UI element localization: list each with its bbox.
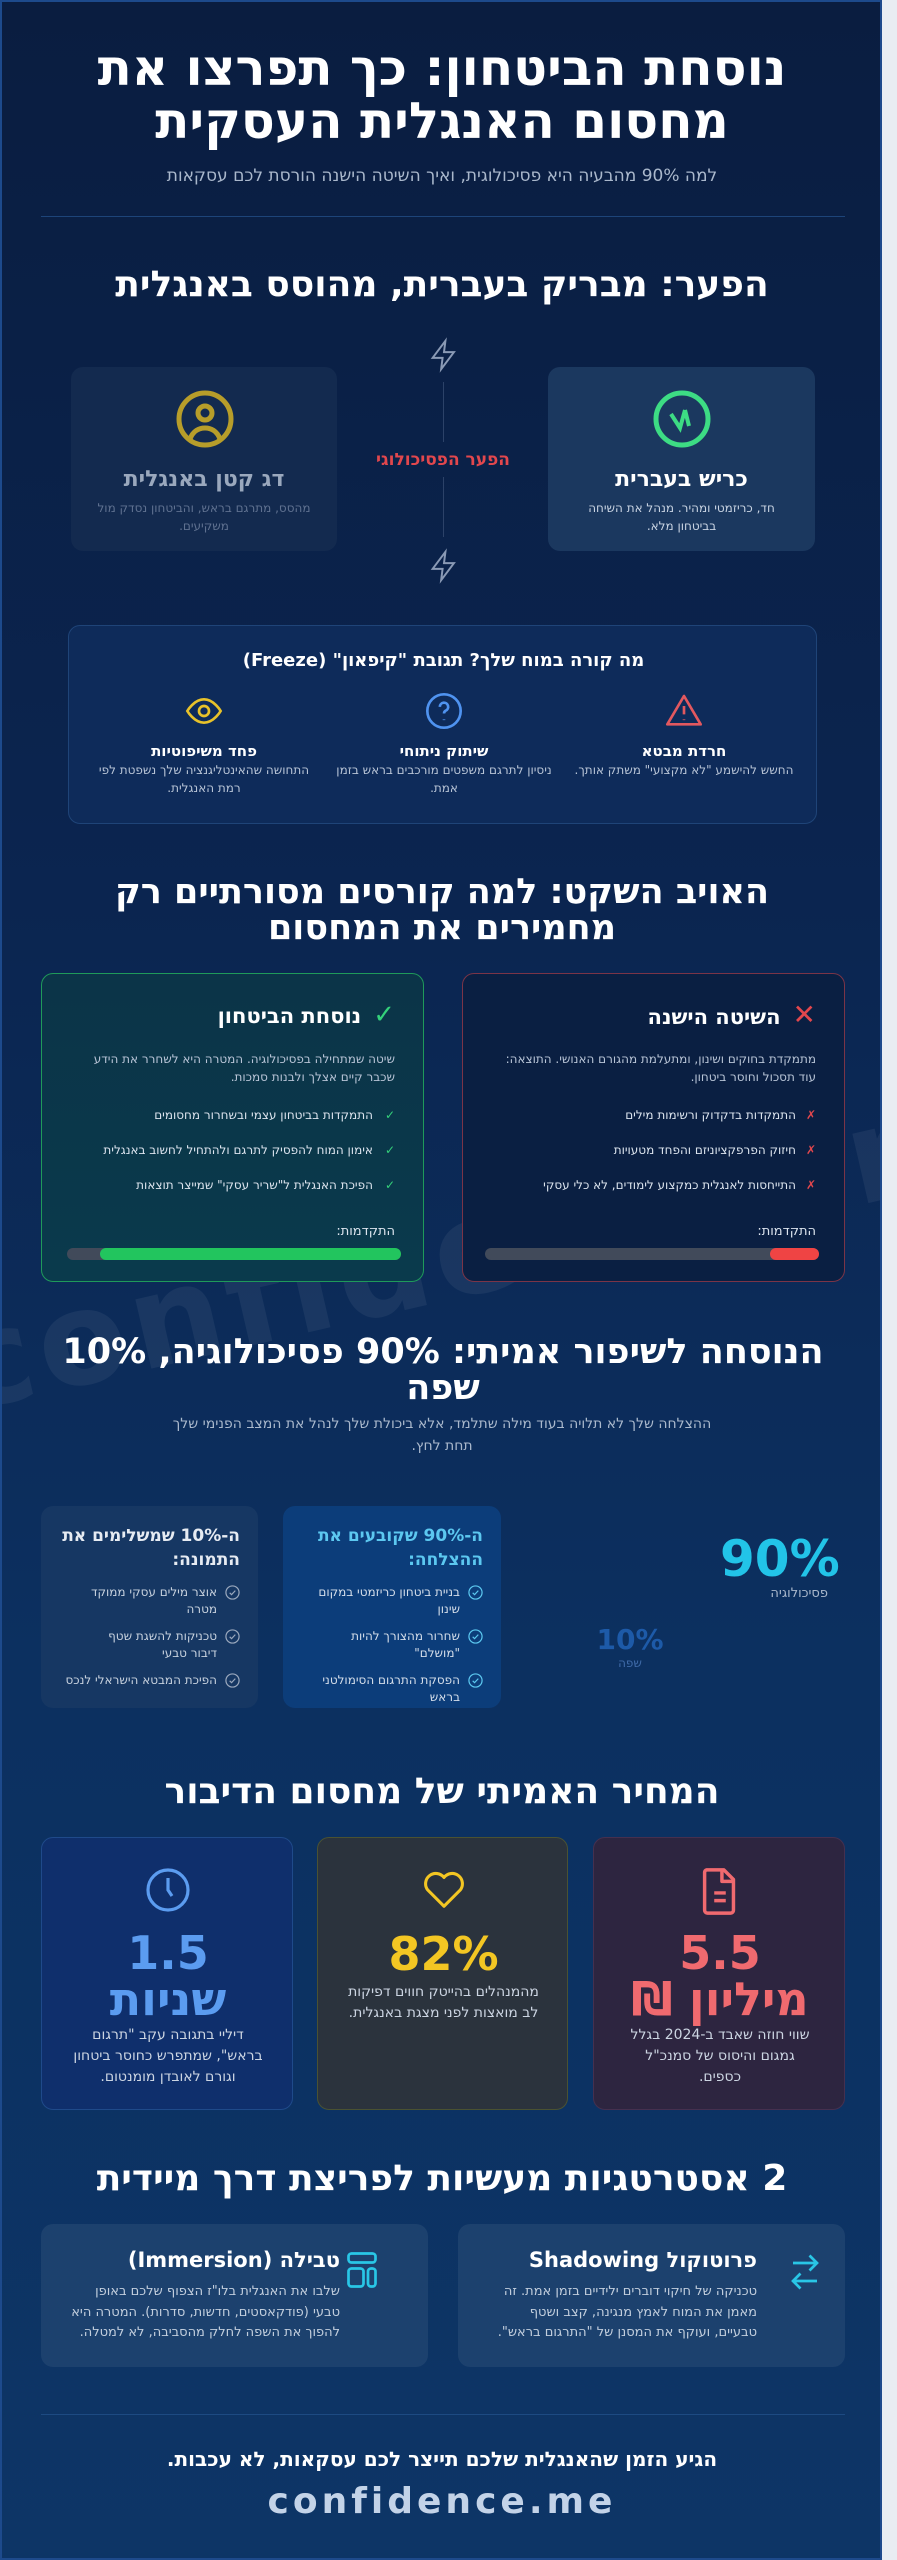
title — [98, 39, 786, 150]
panel: 90% list — [283, 1506, 501, 1708]
heading: formula — [62, 1332, 824, 1408]
number: 1.5 — [127, 1926, 209, 1980]
list: הפסקת התרגום הסימולטני בראש — [322, 1673, 460, 1704]
icon: arrows — [791, 2254, 819, 2290]
panel: confidence formula — [41, 973, 424, 1282]
heading: formula: שפה — [406, 1368, 480, 1408]
box title: ה-90% שקובעים את ההצלחה: — [318, 1526, 483, 1570]
panel: 1.5 seconds — [41, 1837, 293, 2110]
card title: דג קטן באנגלית — [124, 467, 284, 492]
number — [631, 1926, 809, 2026]
item: fear of judgment: פחד משיפוטיות — [151, 742, 257, 760]
card title with check: ✓נוסחת הביטחון — [218, 1000, 395, 1030]
text: דיליי בתגובה עקב "תרגום בראש", שמתפרש כחוסר ביטחון וגורם לאובדן מומנטום. — [73, 2027, 263, 2085]
footer tagline: הגיע הזמן שהאנגלית שלכם תייצר לכם עסקאות, לא עכבות. — [167, 2447, 717, 2471]
title: נוסחת הביטחון: כך תפרצו את — [98, 39, 786, 97]
number: שניות — [110, 1972, 226, 2026]
panel: 5.5 million — [593, 1837, 845, 2110]
heading: silent enemy: האויב השקט: למה קורסים מסורתיים רק — [115, 872, 769, 912]
list: בניית ביטחון כריזמטי במקום שינון — [318, 1585, 460, 1616]
list — [318, 1585, 483, 1704]
card title: טבילה (Immersion) — [128, 2248, 340, 2272]
card text: טכניקה של חיקוי דוברים ילידיים בזמן אמת. זה מאמן את המוח לאמץ מנגינה, קצב ושטף טבעיים, ועוקף את המסנן של "התרגום בראש". — [498, 2284, 757, 2340]
list: ✓אימון המוח להפסיק לתרגם ולהתחיל לחשוב באנגלית — [103, 1143, 395, 1157]
stat: 90%: 90% — [720, 1530, 840, 1588]
icon: question — [426, 693, 462, 729]
list: הפיכת המבטא הישראלי לנכס — [65, 1673, 217, 1687]
card text: מהסס, מתרגם בראש, והביטחון נסדק מול משקיעים. — [97, 501, 310, 533]
progress bar — [485, 1248, 819, 1260]
progress label: התקדמות: — [336, 1224, 395, 1239]
progress label: התקדמות: — [757, 1224, 816, 1239]
panel: small fish in English — [71, 367, 337, 551]
title: מחסום האנגלית העסקית — [155, 92, 729, 150]
icon: lightning top — [430, 337, 456, 373]
item: analysis paralysis: ניסיון לתרגם משפטים מורכבים בראש בזמן אמת. — [336, 763, 552, 795]
panel: 82% — [317, 1837, 568, 2110]
list — [543, 1108, 816, 1192]
item: fear of judgment: התחושה שהאינטליגנציה שלך נשפטת לפי רמת האנגלית. — [99, 763, 309, 795]
icon: document — [702, 1868, 736, 1915]
list: ✗התמקדות בדקדוק ורשימות מילים — [625, 1108, 816, 1122]
subtitle: למה 90% מהבעיה היא פסיכולוגית, ואיך השיטה הישנה הורסת לכם עסקאות — [167, 166, 717, 186]
list: ✗חיזוק הפרפקציוניזם והפחד מטעויות — [614, 1143, 816, 1157]
gap label: הפער הפסיכולוגי — [376, 450, 510, 470]
list — [65, 1585, 240, 1688]
number — [110, 1926, 226, 2026]
panel title: מה קורה במוח שלך? תגובת "קיפאון" (Freeze) — [243, 650, 644, 671]
list: טכניקות להשגת שטף דיבור טבעי — [108, 1629, 217, 1660]
item: fear of expression: החשש להישמע "לא מקצועי" משתק אותך. — [575, 763, 793, 777]
card text: שלבו את האנגלית בלו"ז הצפוף שלכם באופן טבעי (פודקאסטים, חדשות, סדרות). המטרה היא להפוך את השפה לחלק מהסביבה, לא למטלה. — [71, 2284, 340, 2340]
heading: strategies: 2 אסטרטגיות מעשיות לפריצת דרך מיידית — [97, 2158, 787, 2199]
card title with X: ✕השיטה הישנה — [648, 998, 816, 1031]
item: analysis paralysis: שיתוק ניתוחי — [400, 742, 488, 760]
progress bar — [67, 1248, 401, 1260]
panel: freeze — [68, 625, 817, 824]
number: 5.5 — [679, 1926, 761, 1980]
panel: immersion — [41, 2224, 428, 2367]
card text: חד, כריזמטי ומהיר. מנהל את השיחה בביטחון מלא. — [588, 501, 775, 533]
subtext: ההצלחה שלך לא תלויה בעוד מילה שתלמד, אלא ביכולת שלך לנהל את המצב הפנימי שלך תחת לחץ. — [173, 1416, 711, 1454]
item: fear of judgment — [99, 698, 309, 795]
icon: lightning bottom — [430, 548, 456, 584]
stat: 10%: שפה — [618, 1656, 642, 1670]
description: מתמקדת בחוקים ושינון, ומתעלמת מהגורם האנושי. התוצאה: עוד תסכול וחוסר ביטחון. — [506, 1052, 816, 1084]
list: אוצר מילים עסקי ממוקד מטרה — [91, 1585, 217, 1616]
box title: ה-10% שמשלימים את התמונה: — [62, 1526, 240, 1570]
heading: silent enemy — [115, 872, 769, 948]
list — [103, 1108, 395, 1192]
list: שחרור מהצורך להיות "מושלם" — [351, 1629, 460, 1660]
number: מיליון ₪ — [631, 1972, 809, 2026]
card title: פרוטוקול Shadowing — [529, 2248, 757, 2272]
heading: silent enemy: מחמירים את המחסום — [268, 908, 616, 948]
card title: כריש בעברית — [615, 467, 748, 492]
icon: heart — [424, 1872, 464, 1908]
panel: old method — [462, 973, 845, 1282]
icon: clock — [146, 1868, 190, 1912]
icon: warning — [666, 694, 702, 726]
list: ✗התייחסות לאנגלית כמקצוע לימודים, לא כלי עסקי — [543, 1178, 816, 1192]
list: ✓התמקדות בביטחון עצמי ובשחרור מחסומים — [154, 1108, 395, 1122]
text: שווי חוזה שאבד ב-2024 בגלל גמגום והיסוס של סמנכ"ל כספים. — [630, 2027, 810, 2085]
stat: 10%: 10% — [596, 1623, 664, 1656]
stat: 90%: פסיכולוגיה — [770, 1586, 828, 1601]
footer brand: confidence.me — [268, 2481, 616, 2522]
item: fear of expression — [575, 694, 793, 777]
icon: green check circle — [654, 390, 710, 448]
description: שיטה שמתחילה בפסיכולוגיה. המטרה היא לשחרר את הידע שכבר קיים אצלך ולבנות סמכות. — [94, 1052, 395, 1084]
heading: true cost: המחיר האמיתי של מחסום הדיבור — [165, 1771, 719, 1812]
panel: shark in Hebrew — [548, 367, 815, 551]
item: analysis paralysis — [336, 693, 552, 795]
heading: the gap: הפער: מבריק בעברית, מהוסס באנגלית — [115, 264, 769, 305]
item: fear of expression: חרדת מבטא — [642, 742, 726, 760]
panel: shadowing — [458, 2224, 845, 2367]
icon: user circle — [176, 390, 234, 448]
icon: eye — [186, 698, 222, 724]
panel: 10% list — [41, 1506, 258, 1708]
number: 82% — [388, 1927, 499, 1981]
text: מהמנהלים בהייטק חווים דפיקות לב מואצות לפני מצגת באנגלית. — [348, 1984, 539, 2021]
heading: formula: הנוסחה לשיפור אמיתי: 90% פסיכולוגיה, 10% — [62, 1332, 824, 1372]
icon: layout — [347, 2252, 377, 2288]
list: ✓הפיכת האנגלית ל"שריר עסקי" שמייצר תוצאות — [136, 1178, 395, 1192]
